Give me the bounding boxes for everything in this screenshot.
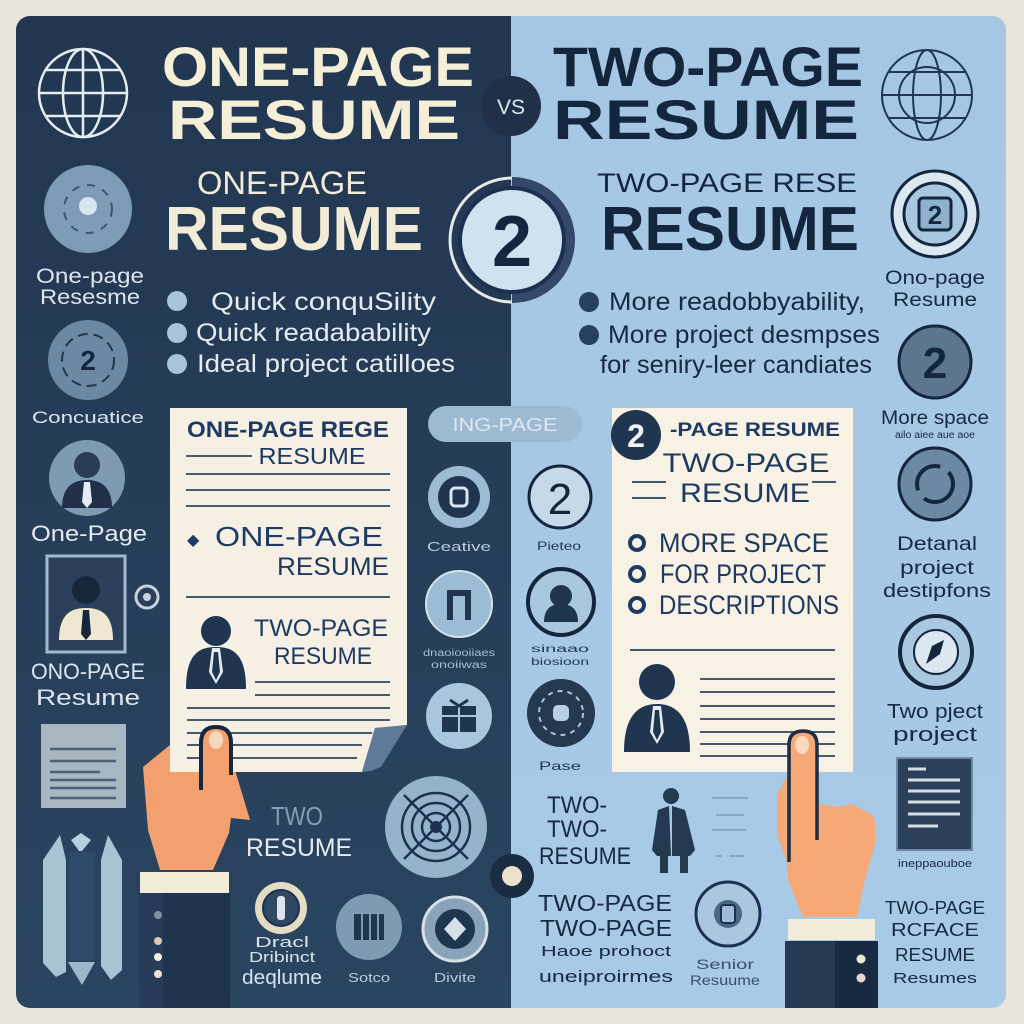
label: direct document xyxy=(242,934,322,989)
pill label: ING-PAGE xyxy=(452,415,558,435)
icon: bottom row c xyxy=(423,897,487,961)
icon: center right 2 xyxy=(529,466,591,528)
icon: person round xyxy=(49,440,125,516)
heading: two-page resume mid: TWO-PAGE RESE xyxy=(597,168,857,198)
panel: left resume sheet xyxy=(170,408,407,772)
center icon row 3 left xyxy=(426,683,492,749)
label: two resume right: TWO- xyxy=(547,816,607,843)
panel: right light side xyxy=(511,16,1006,1008)
caption: Pieteo xyxy=(537,539,581,553)
label: two-page resume resumes: RESUME xyxy=(895,945,975,965)
caption xyxy=(531,644,590,668)
badge: number 2 xyxy=(450,177,575,303)
sheet list: DESCRIPTIONS xyxy=(659,590,839,620)
label: two resume right: RESUME xyxy=(539,843,631,870)
label: one-page resume left xyxy=(36,265,144,309)
icon: faded small sheet xyxy=(712,798,748,856)
icon: globe right xyxy=(882,50,972,140)
icon: right round 1: 2 xyxy=(928,200,942,230)
label: two-page lower: uneiproirmes xyxy=(539,967,673,986)
title: one-page resume xyxy=(162,35,474,151)
icon: large target xyxy=(385,776,487,878)
caption: Ceative xyxy=(427,539,491,554)
sheet lower text: RESUME xyxy=(274,643,372,670)
icon: pen round xyxy=(900,616,972,688)
caption: Sotco xyxy=(348,970,390,985)
caption: Divite xyxy=(434,970,476,985)
heading: two-page resume mid xyxy=(597,168,859,264)
label: one-page resume right: Resume xyxy=(893,290,977,311)
sheet mid text: ◆ xyxy=(187,532,200,549)
label: direct document: deqlume xyxy=(242,967,322,989)
icon: tie and jacket xyxy=(43,833,122,985)
sheet mid text: ONE-PAGE xyxy=(215,521,383,552)
title: one-page resume: ONE-PAGE xyxy=(162,35,474,98)
person silhouette right xyxy=(624,664,690,752)
label: detailed project descriptions: destipfons xyxy=(883,581,991,602)
label: two-page lower xyxy=(538,890,673,986)
label: two resume left xyxy=(246,801,352,862)
sheet lines bottom xyxy=(187,682,390,758)
panel: right resume sheet xyxy=(612,408,853,772)
sheet heading: TWO-PAGE xyxy=(662,448,830,478)
hand right xyxy=(777,730,878,1008)
label: detailed project descriptions: Detanal xyxy=(897,534,977,555)
sheet mid text xyxy=(187,521,389,581)
sheet heading xyxy=(187,417,389,469)
label: two project: project xyxy=(893,724,978,746)
icon: right round 2 xyxy=(899,326,971,398)
heading: one-page resume mid xyxy=(165,165,423,264)
label: direct document: Dribinct xyxy=(249,949,316,966)
sheet heading lines xyxy=(632,482,836,498)
sheet list xyxy=(630,528,839,620)
sheet lines top xyxy=(186,456,390,506)
bullets: left list xyxy=(167,288,455,378)
sheet heading: -PAGE RESUME xyxy=(670,420,840,441)
sheet mid text: RESUME xyxy=(277,553,389,581)
icon: bottom person right xyxy=(696,882,760,946)
label: one-page resume xyxy=(31,659,145,710)
label: two-page lower: Haoe prohoct xyxy=(541,943,672,960)
icon: left round 2 xyxy=(48,320,128,400)
label: conclusive: Concuatice xyxy=(32,408,144,427)
sheet heading: RESUME xyxy=(680,478,810,508)
icon: spiral round xyxy=(899,448,971,520)
label: more space: ailo aiee aue aoe xyxy=(895,430,975,441)
label: two-page resume resumes: TWO-PAGE xyxy=(885,898,985,918)
label: two-page resume resumes: RCFACE xyxy=(891,920,979,940)
icon: left round 1 xyxy=(44,165,132,253)
sheet heading: RESUME xyxy=(258,443,366,469)
label: two resume left: RESUME xyxy=(246,834,352,862)
caption xyxy=(423,648,495,671)
hand left: finger and sleeve xyxy=(139,726,232,1008)
label: senior resume xyxy=(690,956,760,988)
dots: connector xyxy=(136,586,534,898)
vs badge xyxy=(481,76,541,136)
label: direct document: Dracl xyxy=(255,934,309,951)
icon: center right dark xyxy=(527,679,595,747)
label: two-page resume resumes xyxy=(885,898,985,987)
caption: biosioon xyxy=(531,657,589,668)
bullets: left list: Quick conquSility xyxy=(211,288,437,316)
label: two resume right xyxy=(539,792,631,870)
label: two-page resume resumes: Resumes xyxy=(893,970,977,987)
icon: left round 2: 2 xyxy=(80,345,96,376)
badge: 2 on sheet xyxy=(611,410,661,460)
bullets: right list: More readobbyability, xyxy=(609,288,865,316)
center icon row 1 left xyxy=(428,466,490,528)
person silhouette left xyxy=(186,616,246,689)
title: two-page resume xyxy=(553,35,863,151)
sheet lines mid xyxy=(186,596,390,598)
heading: one-page resume mid: RESUME xyxy=(165,195,423,264)
label: two resume left: TWO xyxy=(271,801,323,831)
sheet lower text: TWO-PAGE xyxy=(254,615,388,642)
title: two-page resume: TWO-PAGE xyxy=(553,35,863,98)
bullets: left list: Ideal project catilloes xyxy=(197,350,455,378)
label: small caption: ineppaouboe xyxy=(898,858,972,870)
icon: bottom row a xyxy=(255,882,307,934)
title: two-page resume: RESUME xyxy=(553,88,859,151)
sheet list: FOR PROJECT xyxy=(660,559,826,589)
icon: left hand palm xyxy=(143,745,250,870)
bullets: right list xyxy=(579,288,880,379)
icon: bottom row b xyxy=(336,894,402,960)
label: detailed project descriptions xyxy=(883,534,991,602)
caption: sinaao xyxy=(531,644,590,655)
label: one-page resume: Resume xyxy=(36,685,140,710)
icon: right document xyxy=(897,758,972,850)
caption: Pase xyxy=(539,759,581,773)
bullets: right list: More project desmpses xyxy=(608,321,880,349)
label: one-page resume left: Resesme xyxy=(40,286,140,309)
icon: right round 1 xyxy=(892,171,978,257)
icon: right round 2: 2 xyxy=(923,339,947,388)
heading: one-page resume mid: ONE-PAGE xyxy=(197,165,367,201)
label: two project: Two pject xyxy=(887,701,984,723)
label: senior resume: Resuume xyxy=(690,972,760,988)
badge: number 2: 2 xyxy=(492,202,532,282)
caption: onoiiwas xyxy=(431,660,487,671)
title: one-page resume: RESUME xyxy=(168,88,460,151)
label: one-page resume right xyxy=(885,268,985,311)
vs badge: VS xyxy=(497,96,525,119)
label: one-page: One-Page xyxy=(31,521,147,546)
label: two project xyxy=(887,701,984,746)
icon: two figures xyxy=(652,788,695,873)
label: one-page resume left: One-page xyxy=(36,265,144,288)
heading: two-page resume mid: RESUME xyxy=(601,195,859,264)
label: senior resume: Senior xyxy=(696,956,754,972)
label: two-page lower: TWO-PAGE xyxy=(538,890,672,916)
label: more space xyxy=(881,408,989,441)
icon: center right 2: 2 xyxy=(548,475,572,524)
pill label xyxy=(428,406,582,442)
sheet lines xyxy=(630,650,835,756)
icon: globe left xyxy=(39,49,127,137)
panel: left dark side xyxy=(16,16,512,1008)
label: one-page resume right: Ono-page xyxy=(885,268,985,289)
center icon row 2 left xyxy=(426,571,492,637)
label: more space: More space xyxy=(881,408,989,429)
bullets: right list: for seniry-leer candiates xyxy=(600,351,872,379)
label: two-page lower: TWO-PAGE xyxy=(540,915,672,941)
icon: portrait frame xyxy=(47,556,125,652)
icon: document sheet xyxy=(41,724,126,808)
label: one-page resume: ONO-PAGE xyxy=(31,659,145,684)
caption: dnaoiooiiaes xyxy=(423,648,495,659)
bullets: left list: Quick readabability xyxy=(196,319,432,347)
badge: 2 on sheet: 2 xyxy=(627,418,645,454)
sheet list: MORE SPACE xyxy=(659,528,829,558)
label: two resume right: TWO- xyxy=(547,792,607,819)
label: detailed project descriptions: project xyxy=(900,558,975,579)
sheet lower text xyxy=(254,615,388,670)
icon: center right person xyxy=(528,569,594,635)
sheet heading xyxy=(662,420,840,508)
sheet heading: ONE-PAGE REGE xyxy=(187,417,389,442)
